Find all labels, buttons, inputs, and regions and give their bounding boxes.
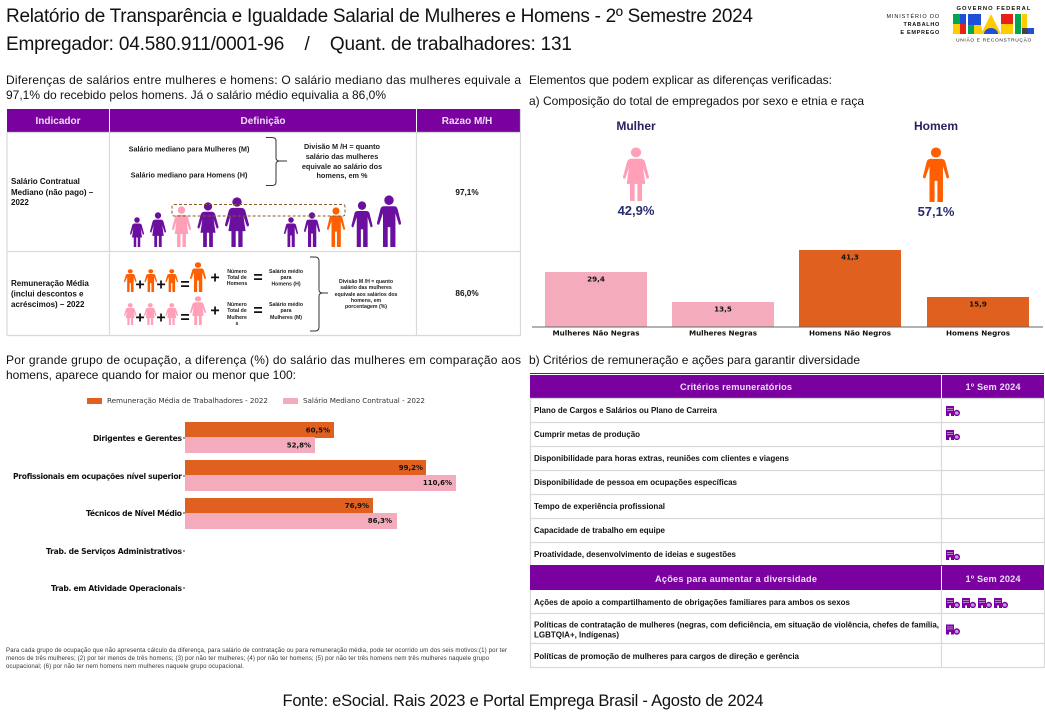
row 1 definition text: Divisão M /H = quanto	[304, 142, 381, 151]
row 2 women formula: Total de	[227, 308, 247, 314]
row 1 definition text: salário das mulheres	[306, 152, 378, 161]
bar chart: salary ratio by occupation: Trab. de Serviços Administrativos	[46, 547, 182, 556]
occupation intro text: homens, aparece quando for maior ou menor que 100:	[6, 368, 296, 382]
bar chart: salary ratio by occupation: Técnicos de Nível Médio	[86, 509, 182, 518]
panel: remuneration criteria table	[530, 374, 1044, 565]
logo: ministério: TRABALHO	[904, 22, 940, 28]
row 2 men formula: Homens (H)	[271, 282, 301, 288]
bar chart: workforce composition: Mulheres Não Negras	[552, 328, 640, 338]
median highlight box	[172, 204, 345, 216]
occupation intro text: Por grande grupo de ocupação, a diferença (%) do salário das mulheres em comparação aos	[6, 353, 521, 367]
title: Relatório de Transparência e Igualdade Salarial de Mulheres e Homens - 2º Semestre 2024	[6, 6, 753, 27]
row 1 women figures	[130, 197, 249, 247]
row 2 indicator: (inclui descontos e	[11, 290, 84, 298]
row 2 ratio: 86,0%	[455, 289, 479, 298]
panel: indicator table	[7, 109, 520, 336]
bar chart: salary ratio by occupation: Profissionais em ocupações nível superior	[13, 472, 182, 481]
row 2 women formula: +	[135, 310, 145, 326]
actions rows: Políticas de contratação de mulheres (negras, com deficiência, em situação de violência, chefes de família,	[534, 620, 939, 630]
bar chart: workforce composition	[532, 250, 1043, 338]
criteria rows: Tempo de experiência profissional	[534, 502, 665, 511]
row 2 bracket and note	[310, 257, 398, 331]
actions header: 1º Sem 2024	[966, 574, 1021, 584]
actions header: Ações para aumentar a diversidade	[655, 574, 817, 584]
row 2 men formula: Salário médio	[269, 269, 303, 275]
table header: Definição	[240, 116, 286, 127]
bar chart: workforce composition: Homens Negros	[946, 328, 1010, 338]
row 1 indicator: 2022	[11, 198, 29, 207]
bar chart: salary ratio by occupation: 86,3%	[368, 517, 392, 525]
row 2 bracket and note: homens, em	[351, 298, 382, 304]
row 1 definition text: Salário mediano para Mulheres (M)	[129, 144, 250, 154]
man share: 57,1%	[918, 204, 955, 219]
logo: ministério: MINISTÉRIO DO	[886, 13, 940, 20]
footnote: ocupacional; (6) por não ter nem homens nem mulheres naquele grupo ocupacional.	[6, 663, 244, 670]
bar chart: workforce composition: 29,4	[587, 274, 605, 284]
woman share: 42,9%	[618, 203, 655, 218]
footnote: menos de três mulheres; (2) por ter menos de três homens; (3) por não ter mulheres; (4) por não ter homens; (5) por não ter três homens nem três mulheres naquele grupo	[6, 655, 490, 662]
woman share: Mulher	[616, 119, 656, 133]
title: Empregador: 04.580.911/0001-96 / Quant. de trabalhadores: 131	[6, 34, 572, 55]
criteria rows: Disponibilidade de pessoa em ocupações específicas	[534, 478, 738, 487]
chart legend: Salário Mediano Contratual - 2022	[303, 396, 425, 405]
footnote: Para cada grupo de ocupação que não apresenta cálculo da diferença, para salário de contratação ou para remuneração média, pode ter ocorrido um dos seis motivos:(1) por ter	[6, 647, 507, 654]
actions check icons	[946, 598, 1007, 634]
row 1 definition text: homens, em %	[316, 171, 368, 180]
bar chart: salary ratio by occupation: Dirigentes e Gerentes	[93, 434, 182, 443]
row 2 indicator: acréscimos) – 2022	[11, 300, 85, 309]
intro text: salary differences	[6, 73, 521, 102]
actions rows: LGBTQIA+, Indígenas)	[534, 630, 619, 640]
row 2 women formula: Mulhere	[227, 315, 247, 321]
row 1 indicator: Mediano (não pago) –	[11, 188, 94, 197]
bar chart: workforce composition: Mulheres Negras	[689, 328, 757, 338]
bar chart: salary ratio by occupation: 99,2%	[399, 464, 423, 472]
bar chart: workforce composition: 13,5	[714, 304, 732, 314]
row 2 bracket and note: equivale aos salários dos	[335, 292, 398, 298]
criteria rows: Capacidade de trabalho em equipe	[534, 526, 666, 535]
bar chart: workforce composition: Homens Não Negros	[809, 328, 891, 338]
row 2 men formula: =	[253, 270, 263, 286]
criteria rows: Plano de Cargos e Salários ou Plano de Carreira	[534, 406, 718, 415]
row 2 indicator	[11, 279, 89, 309]
row 1 definition text	[129, 138, 382, 186]
heading: explanatory elements: Elementos que podem explicar as diferenças verificadas:	[529, 73, 832, 87]
actions rows: Políticas de promoção de mulheres para cargos de direção e gerência	[534, 652, 800, 661]
chart legend	[87, 396, 425, 405]
criteria header	[530, 375, 1044, 398]
row 2 men formula: +	[156, 276, 166, 294]
man share: Homem	[914, 119, 958, 133]
row 2 bracket and note: Divisão M /H = quanto	[339, 279, 393, 285]
logo: ministério	[886, 13, 940, 36]
row 2 women formula: para	[281, 308, 292, 314]
man share	[914, 119, 958, 219]
bar chart: salary ratio by occupation: 76,9%	[345, 502, 369, 510]
logo: governo federal brasil: UNIÃO E RECONSTRUÇÃO	[956, 36, 1032, 44]
title	[6, 6, 753, 55]
logo: governo federal brasil	[953, 6, 1034, 44]
criteria rows: Disponibilidade para horas extras, reuniões com clientes e viagens	[534, 454, 790, 463]
row 2 men formula: Número	[227, 269, 247, 275]
criteria header: Critérios remuneratórios	[680, 382, 792, 392]
row 2 men formula	[124, 262, 303, 294]
source footer: Fonte: eSocial. Rais 2023 e Portal Emprega Brasil - Agosto de 2024	[282, 692, 764, 710]
row 2 men formula: Homens	[227, 281, 247, 287]
footnote	[6, 647, 507, 670]
row 1 indicator: Salário Contratual	[11, 177, 80, 186]
actions header	[530, 566, 1044, 590]
row 1 definition text: Salário mediano para Homens (H)	[131, 170, 248, 180]
intro text: salary differences: Diferenças de salários entre mulheres e homens: O salário mediano das mulheres equivale a	[6, 73, 521, 87]
row 1 ratio: 97,1%	[455, 188, 479, 197]
row 1 definition text: equivale ao salário dos	[302, 162, 382, 171]
row 2 women formula: Mulheres (M)	[270, 315, 302, 321]
heading: explanatory elements: a) Composição do total de empregados por sexo e etnia e raça	[529, 94, 864, 108]
logo: ministério: E EMPREGO	[900, 30, 940, 36]
row 2 women formula: Número	[227, 302, 247, 308]
chart legend: Remuneração Média de Trabalhadores - 2022	[107, 396, 268, 405]
row 2 women formula: s	[236, 321, 239, 327]
row 1 indicator	[11, 177, 94, 207]
row 2 women formula: +	[210, 302, 220, 320]
table header	[7, 109, 520, 132]
table header: Razao M/H	[442, 116, 492, 127]
woman share	[616, 119, 656, 218]
bar chart: salary ratio by occupation: Trab. em Atividade Operacionais	[51, 584, 182, 593]
criteria rows: Cumprir metas de produção	[534, 430, 640, 439]
criteria rows	[534, 406, 790, 559]
row 2 women formula: +	[156, 310, 166, 326]
row 2 men formula: +	[210, 270, 220, 286]
bar chart: workforce composition: 41,3	[841, 252, 859, 262]
row 2 men formula: +	[135, 276, 145, 294]
row 2 women formula	[124, 296, 303, 327]
bar chart: salary ratio by occupation: 52,8%	[287, 442, 311, 450]
row 1 men figures	[284, 195, 401, 247]
bar chart: salary ratio by occupation: 110,6%	[423, 479, 452, 487]
occupation intro text	[6, 353, 521, 382]
heading: explanatory elements	[529, 73, 864, 108]
logo: governo federal brasil: GOVERNO FEDERAL	[956, 6, 1032, 12]
row 2 bracket and note: salário das mulheres	[340, 285, 392, 291]
actions rows: Ações de apoio a compartilhamento de obrigações familiares para ambos os sexos	[534, 598, 851, 607]
row 2 women formula: =	[180, 310, 190, 326]
table header: Indicador	[35, 116, 81, 127]
heading: criteria: b) Critérios de remuneração e ações para garantir diversidade	[529, 353, 860, 367]
row 2 bracket and note: porcentagem (%)	[345, 304, 387, 310]
panel: diversity actions table	[530, 566, 1044, 668]
criteria check icons	[946, 406, 959, 560]
row 2 women formula: =	[253, 302, 263, 320]
actions rows	[534, 598, 939, 661]
row 2 indicator: Remuneração Média	[11, 279, 89, 288]
bar chart: salary ratio by occupation: 60,5%	[306, 426, 330, 434]
row 2 men formula: Total de	[227, 275, 247, 281]
bar chart: workforce composition: 15,9	[969, 300, 987, 308]
row 2 men formula: =	[180, 276, 190, 294]
bar chart: salary ratio by occupation	[13, 422, 456, 593]
intro text: salary differences: 97,1% do recebido pelos homens. Já o salário médio equivalia a 86,0%	[6, 88, 386, 102]
row 2 women formula: Salário médio	[269, 302, 303, 308]
criteria header: 1º Sem 2024	[966, 382, 1021, 392]
criteria rows: Proatividade, desenvolvimento de ideias e sugestões	[534, 550, 737, 559]
row 2 men formula: para	[281, 275, 292, 281]
